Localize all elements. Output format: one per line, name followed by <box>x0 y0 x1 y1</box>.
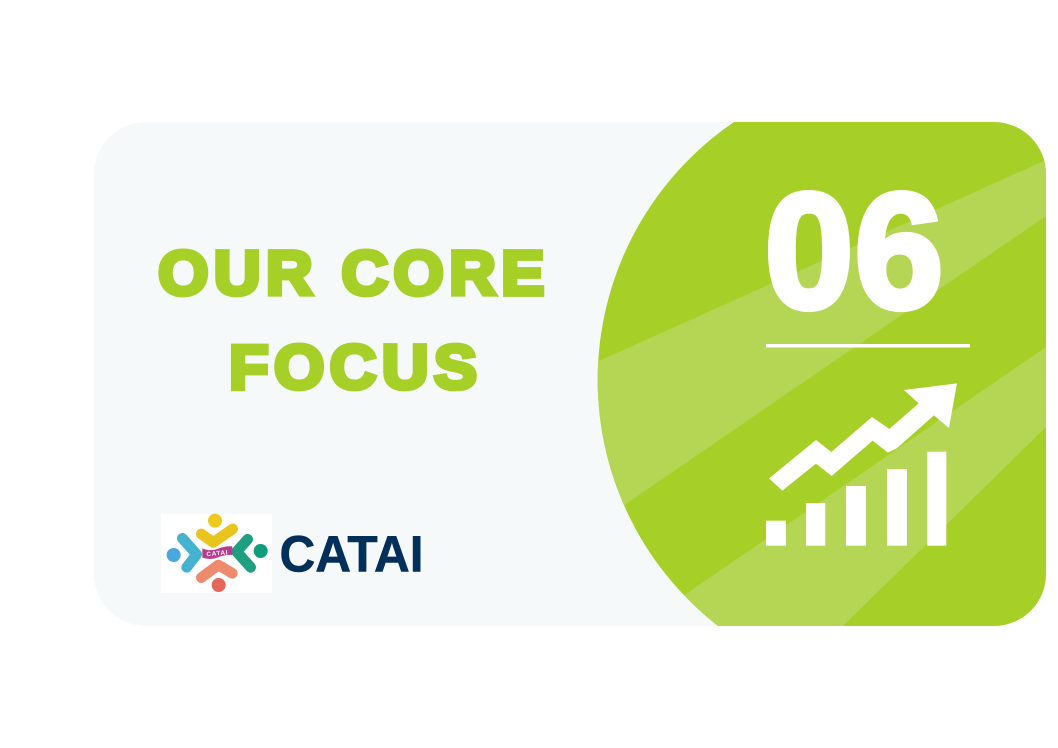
logo mark: CATAI <box>206 549 229 558</box>
heading: our core focus: OUR CORE <box>158 240 550 308</box>
number 06: 06 <box>765 160 944 343</box>
logo wordmark: CATAI <box>280 526 424 582</box>
logo: catai <box>161 514 424 593</box>
icon: zigzag arrow <box>769 383 957 491</box>
panel: light card background <box>94 122 1046 626</box>
panel: green circular section with bands <box>590 122 1046 626</box>
logo mark <box>161 514 272 593</box>
icon: rising bar chart with arrow <box>766 383 957 546</box>
icon: bars <box>766 452 946 546</box>
heading: our core focus: FOCUS <box>229 334 482 402</box>
divider line <box>766 344 970 348</box>
infographic card <box>94 122 1046 626</box>
heading: our core focus <box>158 240 550 402</box>
